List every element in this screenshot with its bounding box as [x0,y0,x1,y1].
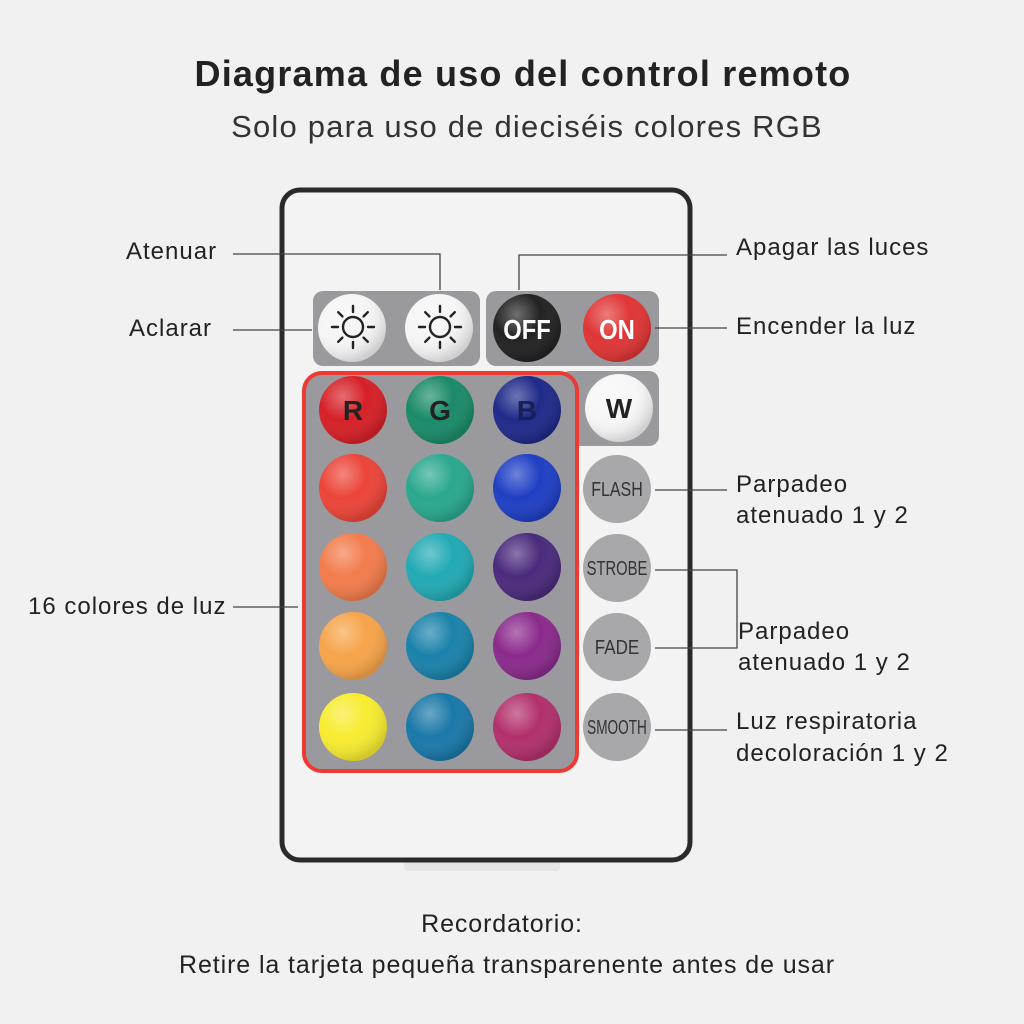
panel: W: W [606,393,633,424]
labels: 16 colores de luz [28,593,226,620]
labels: atenuado 1 y 2 [738,649,911,676]
labels: Encender la luz [736,313,916,340]
panel: power: OFF [503,313,551,345]
panel: 16 colors [304,373,577,771]
mode buttons [583,455,651,761]
mode buttons: SMOOTH [587,716,647,739]
panel: power [486,291,659,366]
mode buttons: FLASH [591,478,643,500]
mode buttons: FADE [595,636,639,658]
panel: power: ON [599,313,635,345]
labels: Apagar las luces [736,234,929,261]
panel: brightness [313,291,480,366]
labels: Luz respiratoria [736,708,917,735]
remote body [282,190,690,871]
labels: Aclarar [129,315,212,342]
reminder [179,910,835,979]
labels [28,234,949,767]
reminder: Recordatorio: [421,910,583,938]
labels: Parpadeo [736,471,848,498]
labels: atenuado 1 y 2 [736,502,909,529]
labels: Atenuar [126,238,217,265]
labels: Parpadeo [738,618,850,645]
labels: decoloración 1 y 2 [736,740,949,767]
leader lines [233,254,737,730]
panel: 16 colors: R [343,395,363,426]
title: Diagrama de uso del control remoto [195,53,851,94]
subtitle: Solo para uso de dieciséis colores RGB [231,109,823,144]
panel: 16 colors: G [429,395,451,426]
reminder: Retire la tarjeta pequeña transparenente antes de usar [179,951,835,979]
mode buttons: STROBE [587,557,647,580]
panel: W [560,371,659,446]
panel: 16 colors: B [517,395,537,426]
